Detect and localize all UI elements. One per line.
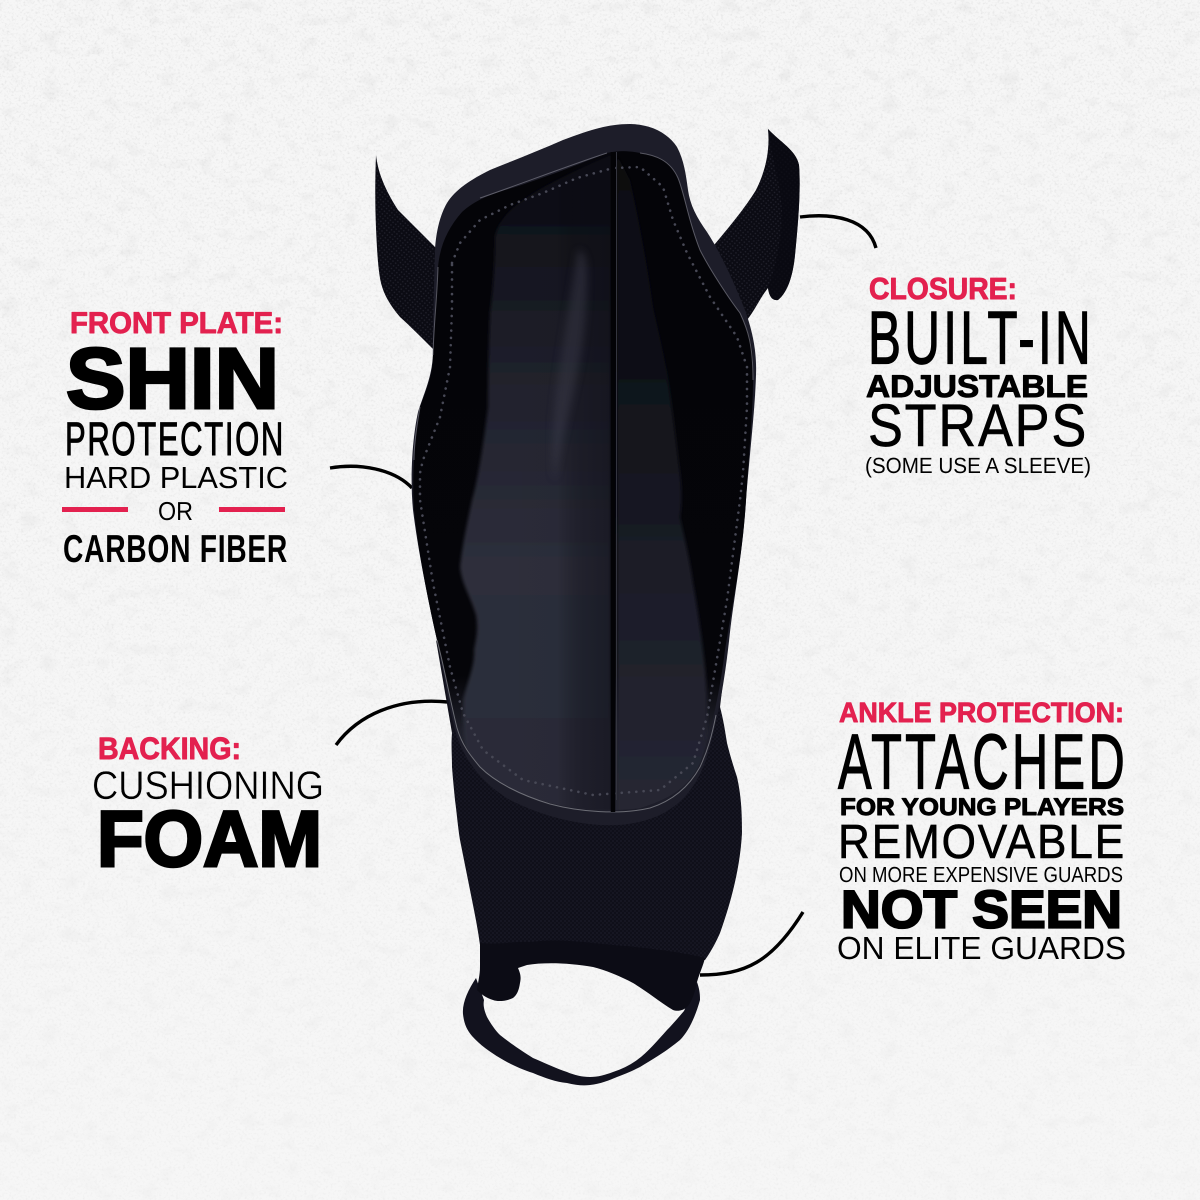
elite guards note: ON ELITE GUARDS xyxy=(837,930,1126,966)
for young players: FOR YOUNG PLAYERS xyxy=(840,794,1124,821)
illustration: black shin guard xyxy=(375,124,800,1085)
removable: REMOVABLE xyxy=(838,816,1126,869)
ankle sleeve in knit fabric xyxy=(452,700,742,960)
connector line: backing xyxy=(336,701,448,745)
callout: ankle protection xyxy=(837,697,1128,966)
heading: BACKING: xyxy=(98,731,241,766)
expensive guards note: ON MORE EXPENSIVE GUARDS xyxy=(839,862,1123,887)
heading: CLOSURE: xyxy=(869,272,1017,306)
dark base of plate xyxy=(413,151,753,716)
ankle loop strap xyxy=(463,978,700,1085)
glossy plate face xyxy=(413,151,753,810)
callout: backing xyxy=(92,731,324,883)
heading: FRONT PLATE: xyxy=(70,307,283,340)
left elastic strap xyxy=(375,155,440,352)
right strap with velcro tab xyxy=(710,129,800,320)
carbon fiber: CARBON FIBER xyxy=(63,528,288,571)
or: OR xyxy=(158,496,193,526)
neoprene rim of front plate xyxy=(412,124,756,825)
connector line: ankle protection xyxy=(700,912,803,975)
adjustable: ADJUSTABLE xyxy=(866,368,1088,404)
stitching around plate xyxy=(420,167,747,795)
upper plate highlight line xyxy=(414,153,753,460)
protection: PROTECTION xyxy=(65,412,285,465)
shin: SHIN xyxy=(66,331,279,427)
darkening toward seam xyxy=(567,300,611,810)
heading: ANKLE PROTECTION: xyxy=(839,697,1124,728)
velcro overlap shading xyxy=(768,129,800,300)
reflection streak xyxy=(554,252,588,452)
gloss right panel xyxy=(616,160,708,725)
sleeve note: (SOME USE A SLEEVE) xyxy=(865,453,1091,478)
rear foam shoulders xyxy=(436,632,729,733)
connector line: closure xyxy=(800,216,876,248)
hard plastic: HARD PLASTIC xyxy=(64,461,288,495)
connector line: front plate xyxy=(330,466,412,488)
plate rim edge line xyxy=(437,640,716,812)
not seen: NOT SEEN xyxy=(841,880,1122,940)
foam: FOAM xyxy=(97,794,322,883)
gloss left panel xyxy=(460,155,611,830)
center seam xyxy=(611,152,615,812)
callout: front plate xyxy=(62,307,288,571)
straps: STRAPS xyxy=(868,392,1088,459)
sleeve hem xyxy=(477,940,705,1011)
right divider xyxy=(219,507,285,512)
left divider xyxy=(62,507,128,512)
callout: closure xyxy=(865,272,1094,478)
cushioning: CUSHIONING xyxy=(92,764,324,808)
